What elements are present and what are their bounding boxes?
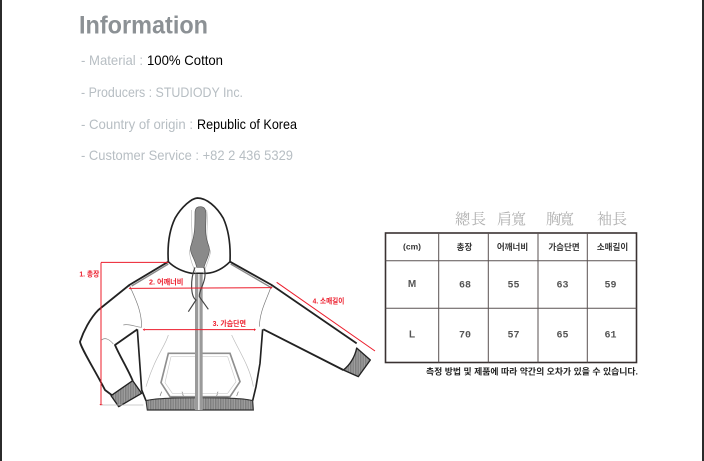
- material line: 100% Cotton: [147, 52, 223, 68]
- producers line: - Producers : STUDIODY Inc.: [81, 84, 243, 100]
- table header row: [403, 242, 628, 252]
- table row M: 63: [556, 280, 569, 292]
- table row L: 70: [459, 330, 471, 342]
- table header row: 어깨너비: [497, 242, 528, 252]
- handwritten chinese column headings: 胸寬: [546, 208, 574, 229]
- handwritten chinese column headings: 袖長: [597, 208, 627, 229]
- hood: [168, 198, 230, 273]
- table row L: 57: [507, 330, 520, 342]
- table row M: 59: [604, 280, 617, 292]
- drawstrings: [188, 267, 208, 312]
- table row M: M: [408, 279, 416, 290]
- text block: product information: [81, 52, 297, 163]
- table grid: [386, 233, 636, 362]
- table header row: 가슴단면: [548, 242, 580, 252]
- table header row: (cm): [403, 242, 421, 252]
- table row M: [408, 279, 617, 292]
- hem ribbing: [146, 398, 253, 410]
- measurement lines: [99, 262, 375, 406]
- kangaroo pocket: [146, 335, 253, 397]
- customer service line: - Customer Service : +82 2 436 5329: [81, 147, 293, 163]
- measurement labels: [79, 270, 344, 328]
- table row L: [409, 330, 617, 342]
- handwritten chinese column headings: 總長: [455, 208, 486, 229]
- table row L: 65: [556, 330, 569, 342]
- table row L: L: [409, 330, 415, 340]
- table row M: 55: [507, 280, 520, 292]
- measurement labels: 1. 총장: [79, 270, 100, 279]
- country of origin line: [81, 116, 297, 132]
- title: Information: [79, 12, 208, 40]
- handwritten chinese column headings: 肩寬: [497, 208, 526, 229]
- table header row: 소매길이: [597, 242, 628, 252]
- jacket diagram: [79, 198, 375, 410]
- country of origin line: - Country of origin :: [81, 116, 193, 132]
- material line: [81, 52, 223, 68]
- jacket body and sleeves: [80, 262, 357, 401]
- measurement labels: 4. 소매길이: [313, 297, 344, 306]
- table row M: 68: [459, 280, 471, 292]
- size table: [386, 233, 636, 362]
- right cuff: [343, 348, 370, 377]
- table header row: 총장: [457, 242, 472, 252]
- country of origin line: Republic of Korea: [197, 116, 297, 132]
- zipper: [195, 274, 203, 410]
- left cuff: [111, 381, 142, 407]
- measurement labels: 2. 어깨너비: [149, 278, 183, 287]
- measurement labels: 3. 가슴단면: [213, 319, 246, 328]
- table footnote: 측정 방법 및 제품에 따라 약간의 오차가 있을 수 있습니다.: [426, 366, 638, 376]
- material line: - Material :: [81, 52, 143, 68]
- handwritten chinese column headings: [455, 208, 627, 229]
- table row L: 61: [604, 330, 617, 342]
